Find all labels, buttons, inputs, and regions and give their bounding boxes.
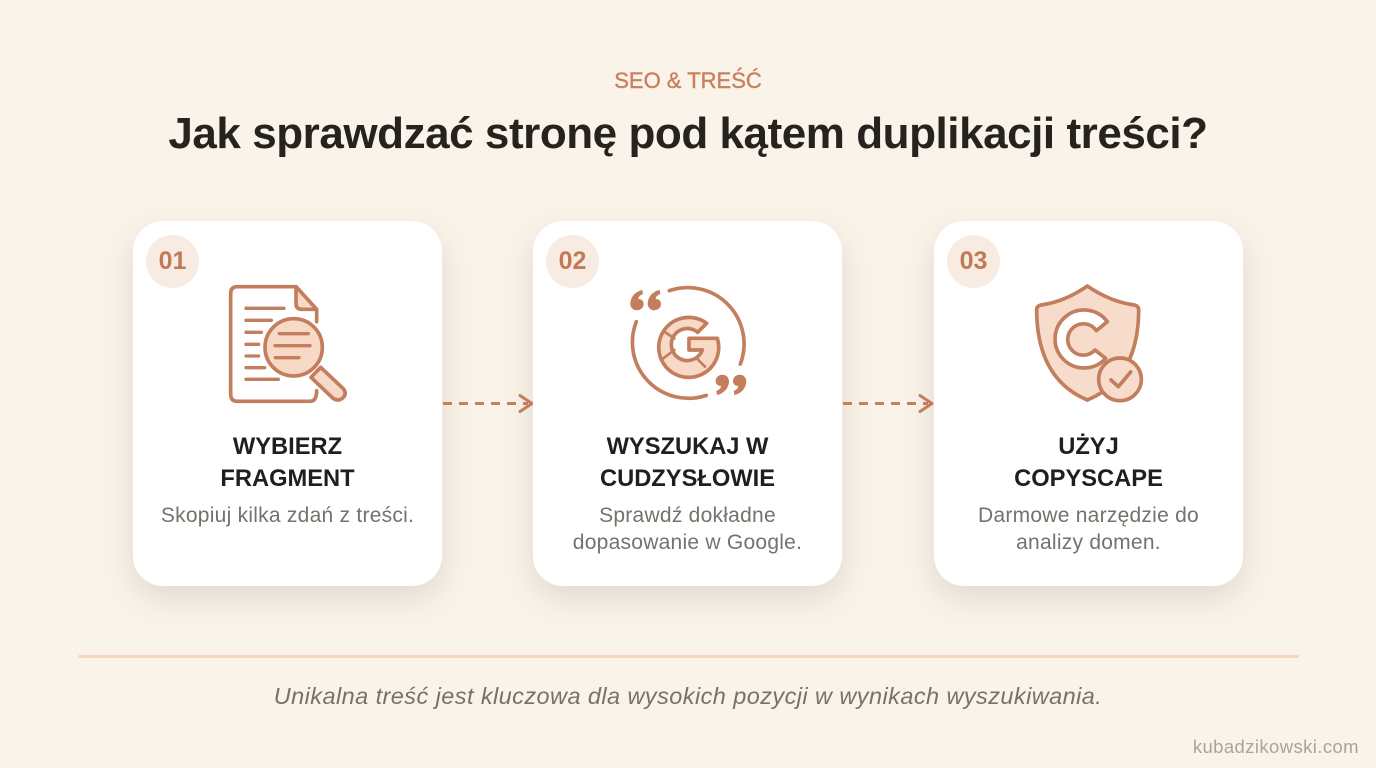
step 3 description (978, 504, 1199, 554)
step 2 heading: WYSZUKAJ W (607, 434, 768, 460)
panel: step 1 (133, 221, 442, 586)
right quote (716, 375, 729, 395)
step number 02 (546, 235, 599, 288)
icon: document with magnifier (228, 284, 348, 404)
step 1 heading (220, 434, 355, 492)
step 2 heading (600, 434, 775, 492)
panel: step 3 (934, 221, 1243, 586)
step 1 heading: WYBIERZ (233, 434, 342, 460)
panel: step 2 (533, 221, 842, 586)
watermark: kubadzikowski.com (1193, 736, 1359, 757)
footer note: Unikalna treść jest kluczowa dla wysokich pozycji w wynikach wyszukiwania. (274, 683, 1102, 709)
title: Jak sprawdzać stronę pod kątem duplikacji treści? (168, 109, 1208, 158)
step 1 description: Skopiuj kilka zdań z treści. (161, 504, 414, 527)
arrow: step 1 to step 2 (443, 394, 533, 414)
eyebrow label: SEO & TREŚĆ (614, 68, 762, 93)
step number 01 (146, 235, 199, 288)
step number 02: 02 (559, 247, 586, 275)
step 1 heading: FRAGMENT (220, 466, 355, 492)
arrow: step 2 to step 3 (843, 394, 934, 414)
step 3 description: analizy domen. (1016, 531, 1161, 554)
step number 03: 03 (960, 247, 987, 275)
step 3 description: Darmowe narzędzie do (978, 504, 1199, 527)
step 3 heading: COPYSCAPE (1014, 466, 1163, 492)
step 2 description: Sprawdź dokładne (599, 504, 776, 527)
step number 01: 01 (159, 247, 186, 275)
step 3 heading: UŻYJ (1058, 434, 1119, 460)
icon: Google G in quotation marks (630, 286, 746, 400)
step 2 description: dopasowanie w Google. (573, 531, 802, 554)
step number 03 (947, 235, 1000, 288)
icon: shield with copyright C and check (1034, 284, 1144, 402)
step 3 heading (1014, 434, 1163, 492)
step 2 heading: CUDZYSŁOWIE (600, 466, 775, 492)
left quote (630, 290, 644, 310)
footer divider (78, 655, 1299, 658)
step 2 description (573, 504, 802, 554)
